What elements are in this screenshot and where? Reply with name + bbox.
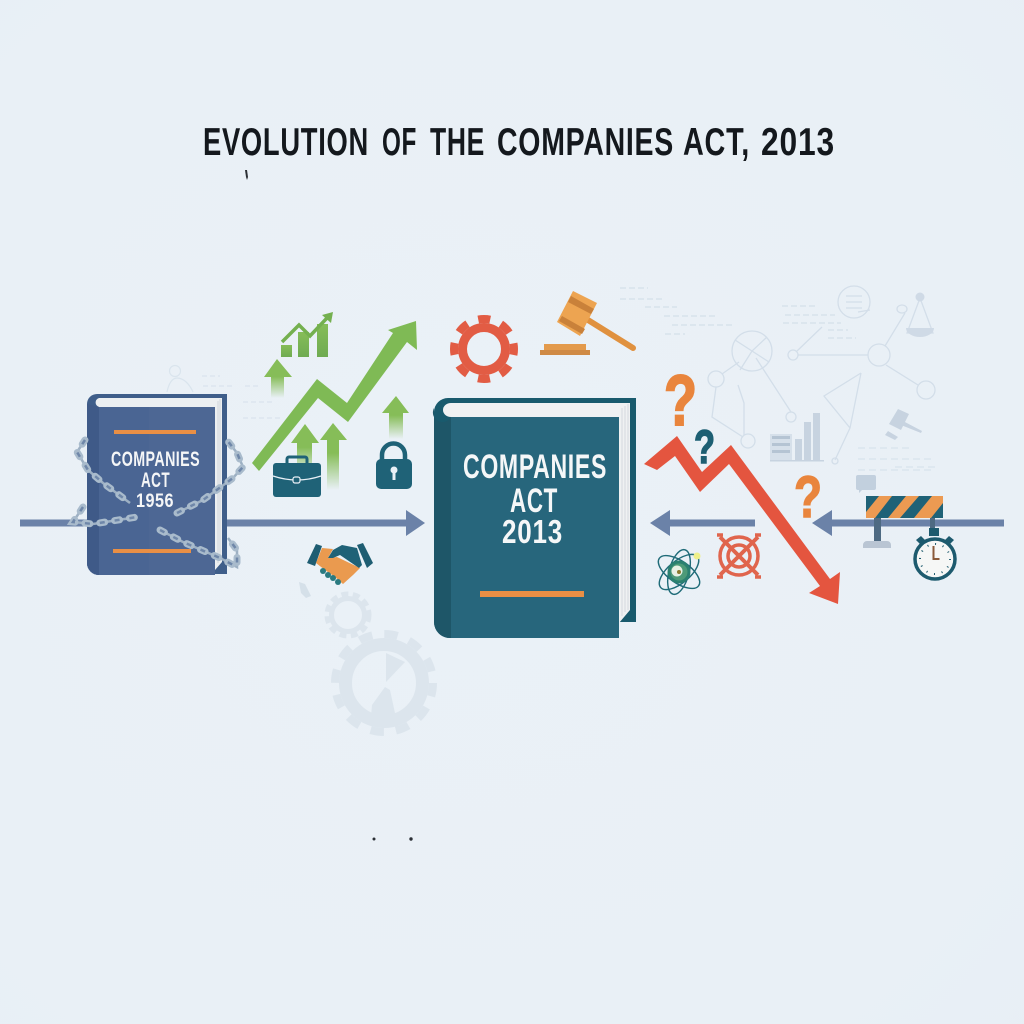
small image specks [245, 170, 413, 841]
icon: briefcase [273, 457, 321, 497]
2013 title text [463, 448, 607, 550]
title: OF [382, 121, 417, 164]
right timeline arrows [650, 510, 1004, 536]
question mark: small orange: ? [794, 465, 822, 530]
title: 2013 [761, 121, 835, 164]
1956 title text: 1956 [136, 490, 174, 512]
question mark: teal: ? [694, 420, 715, 473]
icon: red gear [454, 319, 514, 379]
title: EVOLUTION [203, 121, 369, 164]
book: Companies Act 2013 [433, 398, 636, 638]
title: ACT, [683, 121, 750, 164]
title: THE [430, 121, 485, 164]
2013 orange rule [480, 591, 584, 597]
chains around the 1956 book [73, 440, 243, 567]
icon: stopwatch [915, 528, 955, 579]
icon: road barricade [863, 496, 943, 548]
faint gavel icon [885, 409, 922, 440]
1956 top orange rule [114, 430, 196, 434]
2013 title text: ACT [510, 482, 558, 520]
faint large gear icon [335, 634, 433, 732]
book: Companies Act 1956 [87, 394, 227, 575]
icon: crossed target [717, 535, 761, 577]
2013 title text: COMPANIES [463, 448, 607, 486]
faint background network: left of book [167, 366, 283, 418]
green up arrows [264, 359, 409, 490]
left timeline arrow [20, 510, 425, 536]
1956 bottom orange rule [113, 549, 191, 553]
green rising arrow [252, 321, 417, 471]
faint background network: upper right [620, 286, 935, 470]
icon: chat bubble [856, 475, 876, 493]
question mark: large orange: ? [664, 362, 697, 441]
icon: atom [653, 547, 705, 597]
icon: growth bar chart [281, 312, 333, 357]
icon: padlock [376, 444, 412, 489]
title: COMPANIES [497, 121, 674, 164]
title [203, 121, 835, 164]
faint bar chart icon [770, 413, 824, 462]
icon: gavel [540, 291, 633, 355]
1956 title text: COMPANIES [111, 448, 200, 471]
1956 title text: ACT [141, 469, 170, 492]
red falling arrow [644, 436, 840, 604]
2013 title text: 2013 [502, 513, 563, 550]
faint small gear icon [299, 582, 369, 636]
1956 title text [111, 448, 200, 512]
icon: handshake [307, 543, 373, 585]
